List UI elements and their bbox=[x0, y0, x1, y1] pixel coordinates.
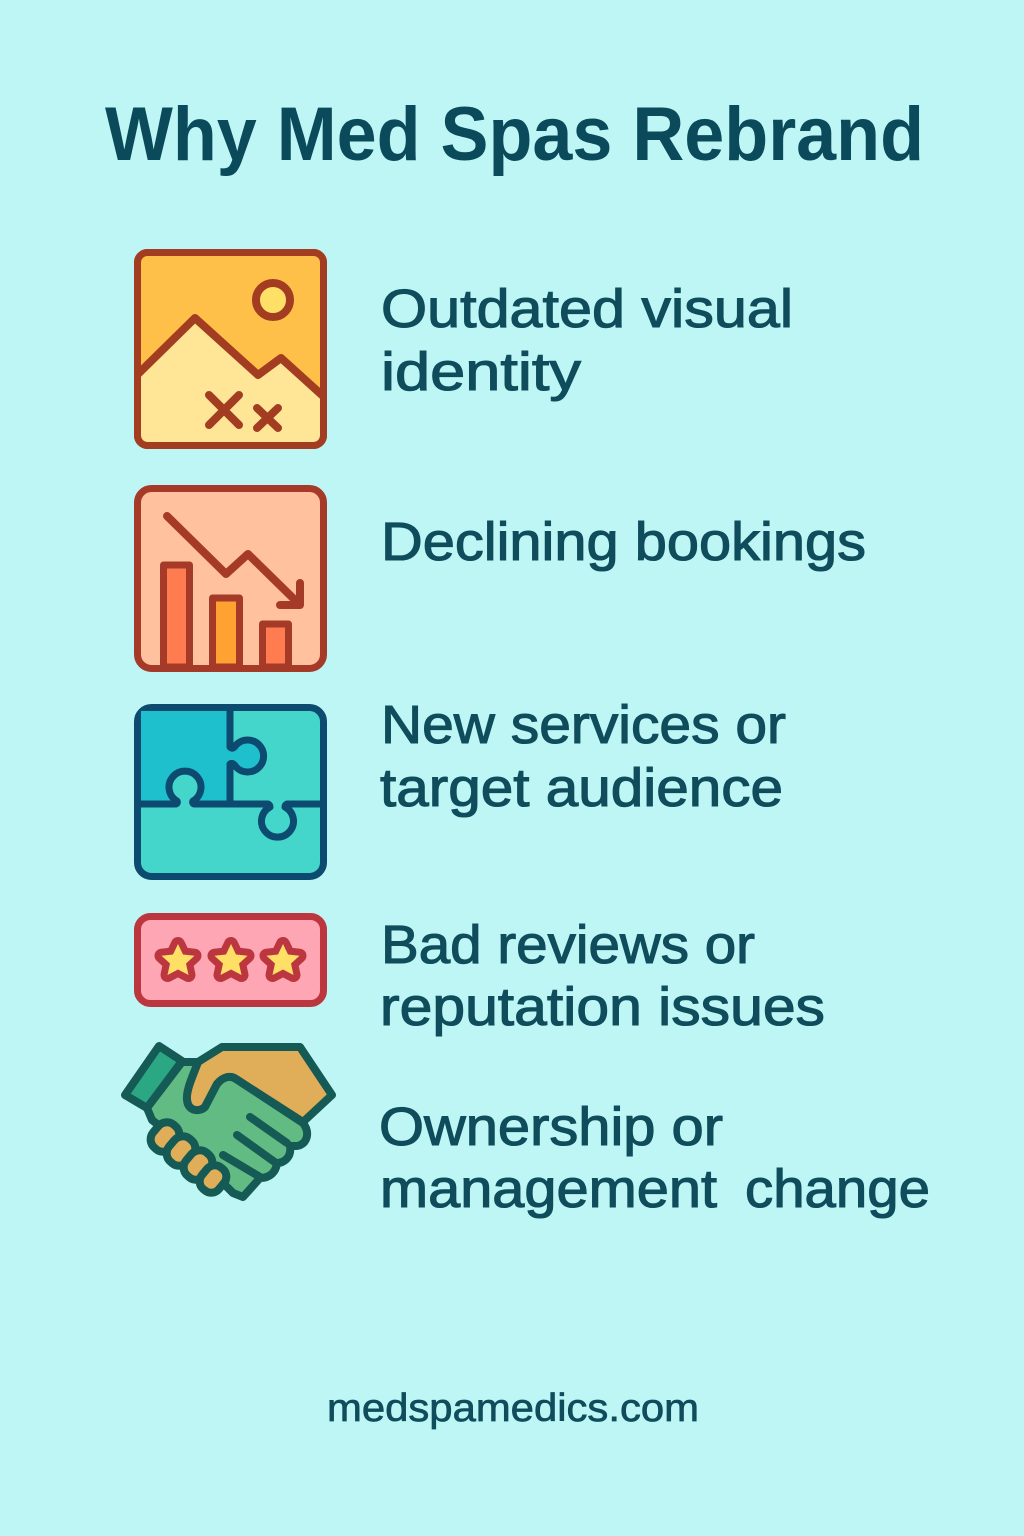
text: new services or target audience: target audience bbox=[380, 758, 783, 818]
text: new services or target audience: New services or bbox=[381, 695, 786, 755]
text: bad reviews or reputation issues: reputation issues bbox=[380, 977, 825, 1037]
text: ownership or management change: Ownership or bbox=[379, 1097, 723, 1157]
text: bad reviews or reputation issues bbox=[380, 915, 825, 1037]
text: outdated visual identity: identity bbox=[381, 342, 581, 402]
icon: outdated picture bbox=[138, 252, 324, 446]
text: new services or target audience bbox=[380, 695, 786, 818]
text: bad reviews or reputation issues: Bad reviews or bbox=[381, 915, 755, 975]
text: ownership or management change bbox=[379, 1097, 930, 1219]
text: ownership or management change: change bbox=[745, 1159, 930, 1219]
text: outdated visual identity bbox=[381, 279, 793, 402]
title: Why Med Spas Rebrand bbox=[105, 92, 924, 177]
text: declining bookings: Declining bookings bbox=[381, 512, 866, 572]
icon: handshake bbox=[125, 1046, 332, 1197]
icon: three star rating bbox=[138, 916, 324, 1004]
footer website: medspamedics.com bbox=[327, 1387, 699, 1430]
icon: puzzle pieces bbox=[138, 708, 324, 876]
text: ownership or management change: management bbox=[380, 1159, 717, 1219]
icon: declining bar chart bbox=[138, 488, 324, 668]
text: outdated visual identity: Outdated visual bbox=[381, 279, 793, 339]
